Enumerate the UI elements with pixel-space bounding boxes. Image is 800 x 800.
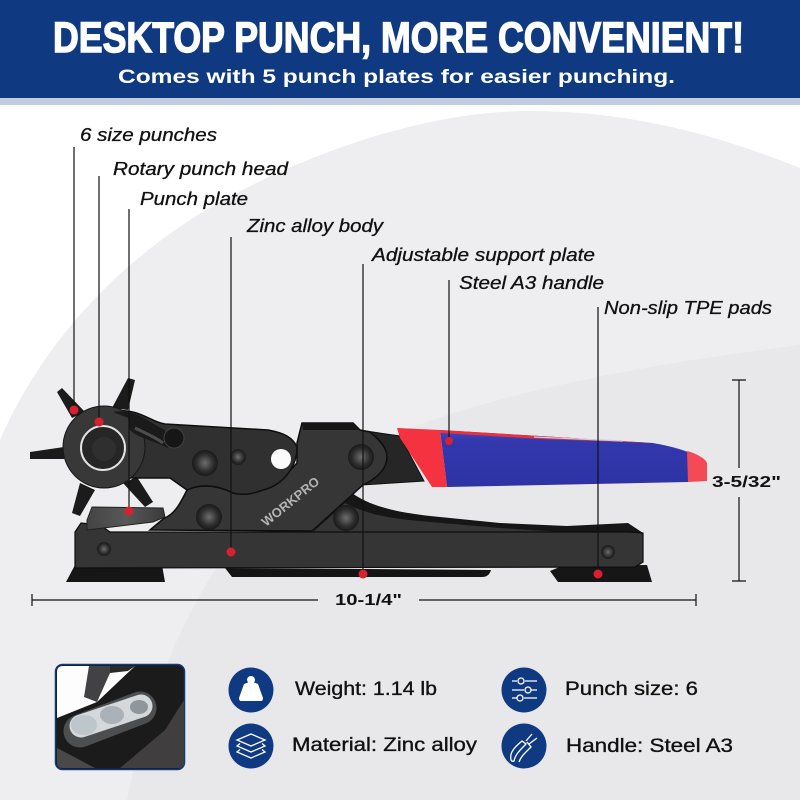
dimension: height — [712, 380, 781, 581]
icon: sliders — [502, 668, 546, 712]
handle arm — [362, 431, 424, 485]
callout: rotary punch head: Rotary punch head — [113, 159, 289, 179]
spec: handle: Handle: Steel A3 — [566, 735, 733, 757]
callout: 6 size punches: 6 size punches — [80, 125, 217, 145]
dimension: length — [32, 592, 696, 609]
header banner — [0, 0, 800, 105]
inset photo: punch plate — [56, 664, 184, 770]
spec: weight: Weight: 1.14 lb — [295, 678, 437, 700]
icon: weight — [228, 668, 274, 712]
callout: non-slip pads: Non-slip TPE pads — [604, 298, 772, 318]
icon: layers — [228, 724, 274, 768]
callout: steel handle — [445, 273, 604, 445]
subtitle: Comes with 5 punch plates for easier punching. — [118, 66, 675, 88]
lever with spring — [310, 493, 643, 534]
feet and strip — [66, 565, 165, 582]
callout: zinc alloy body: Zinc alloy body — [246, 216, 384, 236]
spec: punch size: Punch size: 6 — [565, 678, 698, 700]
rivets — [192, 450, 218, 476]
callout: adjustable support plate: Adjustable support plate — [371, 245, 595, 265]
spec: material: Material: Zinc alloy — [292, 734, 477, 756]
callout: steel handle: Steel A3 handle — [459, 273, 604, 293]
punch plate — [87, 507, 165, 530]
callout: punch plate: Punch plate — [140, 189, 248, 209]
dimension: length: 10-1/4" — [335, 592, 402, 609]
spikes — [57, 388, 85, 418]
callout: non-slip pads — [594, 298, 772, 578]
punch head — [63, 406, 145, 488]
callout: zinc alloy body — [226, 216, 384, 556]
dimension: height: 3-5/32" — [712, 474, 781, 491]
base bar — [75, 523, 643, 568]
upper plate — [113, 411, 297, 494]
lower plate with centre block — [150, 423, 387, 531]
callout: adjustable support plate — [358, 245, 595, 578]
brand mark: WORKPRO — [258, 474, 322, 529]
pivot hole — [271, 449, 291, 469]
screw — [164, 428, 184, 448]
callout: rotary punch head — [94, 159, 289, 426]
product illustration: hole punch pliers — [30, 378, 707, 582]
callout: 6 size punches — [70, 125, 217, 414]
icon: pliers — [502, 724, 546, 768]
lever arm — [113, 411, 168, 448]
callout: punch plate — [124, 189, 248, 516]
handle grip — [440, 430, 688, 487]
